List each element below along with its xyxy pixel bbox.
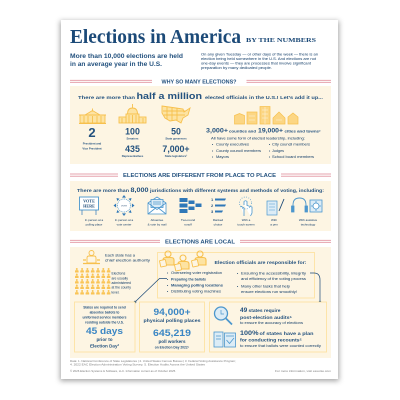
leadership list: •: [212, 155, 214, 159]
responsibilities list left: Overseeing voter registration: [171, 271, 222, 275]
recounts text: to ensure that ballots were counted correctly: [240, 344, 322, 348]
label: polling place: In person at a: [85, 218, 103, 222]
icon: ballots recount: [214, 332, 236, 347]
icon: mail envelope: [148, 197, 166, 214]
intro paragraph: [201, 52, 318, 70]
leadership list: •: [269, 155, 271, 159]
icon: vote here sign: HERE: [83, 204, 95, 208]
leadership list: County council members: [216, 149, 261, 153]
footer sources: Data: 1. National Conference of State Legislatures | 2. United States Census Bureau | 3. Federal Voting Assistance Program;: [70, 359, 236, 363]
footer sources: For more information, visit essvote.com: [275, 369, 332, 373]
text: chief election authority: chief election authority: [105, 258, 150, 262]
card: 45 days: Election Day³: [90, 344, 120, 348]
recounts text: for conducting recounts⁵: [240, 338, 302, 342]
label: vote center: [115, 218, 133, 226]
icon: magnifying glass: [214, 307, 232, 324]
text: chief election authority: [105, 254, 150, 262]
icon: touch screen: [240, 197, 252, 216]
counties and cities: 3,000+: [206, 128, 228, 134]
responsibilities list right: and efficiency of the voting process: [241, 277, 306, 281]
intro headline: [70, 54, 183, 68]
governors and legislators: State legislators¹: [165, 154, 187, 158]
card: polling places and poll workers: on Election Day 2022⁴: [155, 346, 190, 350]
arrow: ballots connector: [134, 278, 167, 303]
icon: local buildings: [234, 106, 298, 124]
8,000 jurisdictions headline: 8,000: [130, 187, 149, 194]
card: audits and recounts: [210, 302, 326, 352]
8,000 jurisdictions headline: [77, 187, 325, 194]
leadership list: •: [212, 149, 214, 153]
audits text: post-election audits⁵: [240, 315, 292, 320]
icon: capitol: [119, 104, 146, 123]
intro paragraph: On any given Tuesday — or other days of the week — there is an: [201, 52, 318, 56]
text: county level: [112, 272, 131, 294]
half a million headline: elected officials in the U.S.! Let’s add it up...: [205, 95, 323, 100]
icon: chief election authority: [83, 250, 100, 264]
text: county level: are usually: [112, 276, 128, 280]
8,000 jurisdictions headline: jurisdictions with different systems and methods of voting, including:: [149, 188, 325, 193]
half a million headline: half a million: [136, 91, 202, 101]
footer sources: 4. 2022 EAC Election Administration Voting Survey; 5. Election Audits Across the United States: [70, 362, 206, 366]
paper sheet: [60, 20, 339, 381]
label: polling place: polling place: [86, 222, 103, 226]
responsibilities list left: •: [167, 278, 169, 282]
leadership list: County executives: [216, 142, 249, 146]
label: absentee: Absentee: [151, 218, 164, 222]
icon: US map: [162, 106, 190, 123]
8,000 jurisdictions headline: There are more than: [77, 188, 129, 193]
card: 45 days: 45 days: [86, 326, 123, 337]
responsibilities list left: •: [167, 290, 169, 294]
card: polling places and poll workers: [140, 302, 204, 352]
recounts text: [240, 330, 322, 348]
card: polling places and poll workers: 645,219: [153, 328, 191, 339]
label: touch screen: [237, 218, 255, 226]
footer sources: © 2026 Election Systems & Software, LLC. Information current as of October 2025.: [70, 369, 176, 373]
responsibilities list right: ensure elections run smoothly!: [241, 290, 297, 294]
panel: half a million officials: [70, 86, 331, 164]
label: runoff: [181, 218, 195, 226]
responsibilities list left: Distributing voting machines: [171, 290, 221, 294]
responsibilities list left: •: [167, 284, 169, 288]
leadership list: •: [269, 142, 271, 146]
section heading: elections are local: ELECTIONS ARE LOCAL: [165, 240, 236, 246]
card: 45 days: prior to: [96, 337, 113, 342]
title: Elections in America: [70, 26, 241, 48]
leadership list: Mayors: [216, 155, 229, 159]
governors and legislators: State governors: [165, 136, 187, 140]
senators and representatives: 100: [125, 126, 140, 136]
label: assistive technology: With assistive: [299, 218, 317, 222]
responsibilities list left: [167, 271, 223, 294]
card: 45 days: States are required to send: [83, 306, 126, 310]
icon: vote center: [114, 195, 134, 216]
panel: election officials responsibilities: [158, 251, 314, 298]
leadership list: All have some form of elected leadership, including:: [211, 136, 305, 140]
responsibilities list left: Managing polling locations: [171, 284, 223, 288]
label: absentee: [148, 218, 167, 226]
text: county level: Elections: [112, 272, 126, 276]
footer sources: [70, 359, 332, 373]
audits text: to ensure the accuracy of elections: [240, 321, 304, 325]
leadership list: School board members: [272, 155, 314, 159]
intro headline: in an average year in the U.S.: [70, 62, 162, 68]
panel: voting methods: [70, 181, 331, 231]
icon: assistive headphones and keypad: [292, 198, 322, 212]
senators and representatives: 435: [125, 144, 140, 154]
senators and representatives: Representatives: [122, 154, 144, 158]
governors and legislators: 50: [171, 126, 181, 136]
president count: President and: [83, 142, 102, 146]
responsibilities list right: •: [237, 272, 239, 276]
icon: vote here sign: [80, 197, 98, 215]
president count: Vice President: [82, 146, 102, 150]
intro paragraph: preparation by many dedicated people.: [201, 66, 272, 70]
label: pen: a pen: [270, 222, 278, 226]
label: polling place: [85, 218, 103, 226]
icon: ranked choice: 1: [211, 197, 214, 202]
intro paragraph: election being held somewhere in the U.S. And elections are not: [201, 57, 316, 61]
icon: ranked choice: 2: [211, 203, 214, 208]
audits text: states require: [248, 308, 281, 313]
label: touch screen: touch screen: [237, 222, 255, 226]
label: runoff: runoff: [184, 222, 192, 226]
label: ranked choice: choice: [214, 222, 223, 226]
label: assistive technology: [299, 218, 317, 226]
responsibilities list right: •: [237, 284, 239, 288]
leadership list: •: [269, 149, 271, 153]
icon: white house: [79, 108, 106, 124]
icon: pen and ballot: [267, 199, 284, 215]
text: county level: administered: [112, 281, 131, 285]
card: polling places and poll workers: poll workers: [158, 339, 186, 344]
icon: vote here sign: VOTE: [83, 198, 95, 204]
responsibilities list right: Many other tasks that help: [241, 284, 290, 288]
icon: vote center: VOTE: [121, 206, 128, 208]
title: BY THE NUMBERS: [246, 37, 317, 44]
label: vote center: In person at a: [115, 218, 133, 222]
card: polling places and poll workers: physical polling places: [144, 318, 201, 323]
arrow: audits connector: [310, 273, 321, 303]
label: vote center: vote center: [117, 222, 131, 226]
label: runoff: Two-round: [181, 218, 195, 222]
icon: ranked choice: 3: [211, 209, 214, 214]
half a million headline: There are more than: [78, 95, 135, 101]
counties and cities: cities and towns²: [284, 130, 322, 134]
icon: grid of county officials: [75, 268, 110, 294]
card: polling places and poll workers: 94,000+: [154, 307, 191, 318]
card: 45 days: [74, 302, 135, 352]
counties and cities: [206, 128, 322, 134]
label: ranked choice: [213, 218, 224, 226]
icon: two-round runoff: [180, 198, 202, 213]
leadership list: [211, 136, 314, 159]
half a million headline: [78, 91, 323, 101]
icon: ranked choice: [211, 197, 226, 214]
text: chief election authority: Each state has a: [105, 254, 135, 258]
recounts text: 100%: [240, 330, 259, 337]
governors and legislators: 7,000+: [162, 144, 190, 154]
section heading: why so many elections: WHY SO MANY ELECTIONS?: [162, 80, 236, 86]
responsibilities list left: •: [167, 271, 169, 275]
audits text: [240, 307, 304, 325]
responsibilities list right: Ensuring the accessibility, integrity: [241, 272, 306, 276]
president count: 2: [88, 125, 96, 140]
label: pen: With: [271, 218, 277, 222]
leadership list: Judges: [272, 149, 284, 153]
responsibilities heading: Election officials are responsible for:: [214, 260, 307, 265]
label: assistive technology: technology: [301, 222, 316, 226]
label: ranked choice: Ranked: [213, 218, 224, 222]
counties and cities: counties and: [229, 130, 256, 134]
audits text: 49: [240, 307, 248, 314]
icon: three election officials: [159, 251, 206, 271]
card: 45 days: uniformed service members: [83, 316, 127, 320]
panel: elections are local: [70, 247, 331, 358]
leadership list: City council members: [272, 142, 310, 146]
section heading: different from place to place: ELECTIONS ARE DIFFERENT FROM PLACE TO PLACE: [123, 173, 277, 179]
president count: [82, 125, 102, 150]
label: pen: [270, 218, 278, 226]
responsibilities list right: [237, 272, 306, 294]
senators and representatives: [122, 126, 144, 158]
text: county level: level.: [112, 290, 119, 294]
governors and legislators: [162, 126, 190, 158]
responsibilities list left: Preparing the ballots: [171, 278, 206, 282]
leadership list: •: [212, 142, 214, 146]
card: 45 days: residing outside the U.S.: [85, 320, 124, 324]
senators and representatives: Senators: [127, 136, 139, 140]
card: 45 days: absentee ballots to: [90, 310, 119, 314]
label: touch screen: With a: [242, 218, 251, 222]
intro paragraph: one-day events — they are processes that involve significant: [201, 62, 311, 66]
label: absentee: & vote by mail: [148, 222, 167, 226]
counties and cities: 19,000+: [258, 128, 283, 134]
intro headline: More than 10,000 elections are held: [70, 54, 183, 60]
text: county level: at the county: [112, 286, 131, 290]
recounts text: of states have a plan: [260, 331, 314, 336]
